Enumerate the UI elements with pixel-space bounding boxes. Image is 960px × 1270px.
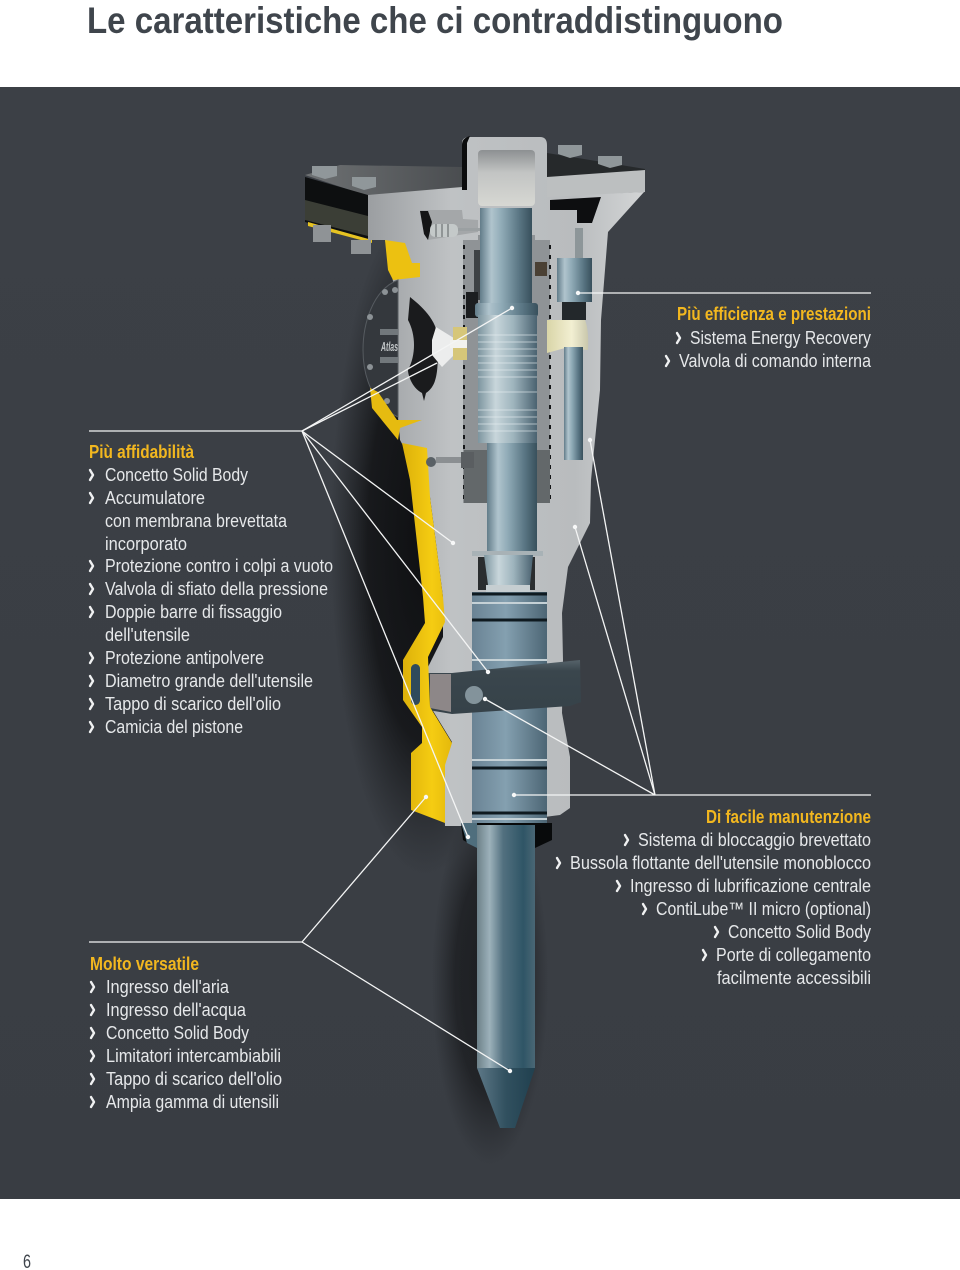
illustration: cutaway of hydraulic hammer [305,136,645,1165]
text block: Molto versatile: Limitatori intercambiabili [106,1046,281,1066]
yellow upper guard [385,240,420,280]
membrane and port [432,327,467,367]
text block: Più affidabilità: Concetto Solid Body [105,465,248,485]
right flange [547,145,645,198]
ribbed piston section [475,303,538,553]
text block: Più affidabilità: Camicia del pistone [105,717,243,737]
text block: Più affidabilità: Valvola di sfiato della pressione [105,579,328,599]
accumulator disc: Atlas [380,339,398,354]
central bore section [463,235,550,503]
accumulator chamber [408,297,438,401]
side slot [411,664,420,705]
text block: Di facile manutenzione: Ingresso di lubrificazione centrale [630,876,871,896]
text block: Più affidabilità: Protezione antipolvere [105,648,264,668]
text block: Di facile manutenzione: Sistema di bloccaggio brevettato [638,830,871,850]
text block: Molto versatile: Ingresso dell'acqua [106,1000,247,1020]
text block: Più affidabilità: Tappo di scarico dell'olio [105,694,281,714]
text block: Più affidabilità: con membrana brevettata [105,511,288,531]
text block: Di facile manutenzione: Porte di collegamento [716,945,871,965]
text block: Molto versatile: Ampia gamma di utensili [106,1092,279,1112]
upper piston [480,208,532,303]
text block: Di facile manutenzione: Bussola flottante dell'utensile monoblocco [570,853,871,873]
title: Le caratteristiche che ci contraddistinguono [87,0,783,41]
text block: Molto versatile: Molto versatile [90,954,199,974]
yellow side guard [402,443,452,823]
tool retaining pin [428,660,581,714]
text block: Più affidabilità [89,442,333,737]
tool shaft [477,825,535,1068]
text block: Molto versatile [90,954,282,1112]
air hose fitting [430,224,480,237]
right cream chamber [547,320,588,353]
lower piston [472,592,547,823]
text block: Più affidabilità: dell'utensile [105,625,190,645]
accumulator disc [363,280,398,417]
right rod [564,347,583,460]
text block: Più efficienza e prestazioni: Più efficienza e prestazioni [677,304,871,324]
side bolt [426,452,474,468]
main body casting [368,137,644,826]
text block: Più efficienza e prestazioni: Sistema Energy Recovery [690,328,871,348]
seal dots [464,245,550,500]
text block: Più efficienza e prestazioni [666,304,872,371]
text block: Più affidabilità: Diametro grande dell'utensile [105,671,313,691]
tool collar [461,823,552,848]
yellow middle guard [370,388,422,440]
text block: Più affidabilità: Più affidabilità [89,442,195,462]
hammer drop shadow [330,205,548,1165]
tool cone tip [477,1068,535,1128]
text block: Di facile manutenzione: Di facile manutenzione [706,807,871,827]
cap black edge [462,136,470,190]
text block: Più affidabilità: Doppie barre di fissaggio [105,602,282,622]
text block: Molto versatile: Ingresso dell'aria [106,977,230,997]
text block: Di facile manutenzione [557,807,871,988]
text block: Più affidabilità: Accumulatore [105,488,205,508]
text block: Di facile manutenzione: facilmente accessibili [717,968,871,988]
leader lines [89,291,871,1073]
bore dark seal blocks [464,250,550,503]
text block: Molto versatile: Concetto Solid Body [106,1023,249,1043]
text block: Di facile manutenzione: Concetto Solid Body [728,922,871,942]
top cap interior [478,150,535,206]
dark undercuts [420,197,601,240]
text block: Molto versatile: Tappo di scarico dell'olio [106,1069,282,1089]
text block: Più efficienza e prestazioni: Valvola di comando interna [679,351,872,371]
left flange [305,165,462,254]
right valve [557,228,592,320]
text block: Più affidabilità: incorporato [105,534,187,554]
piston neck [472,551,543,592]
text block: Di facile manutenzione: ContiLube™ II micro (optional) [656,899,871,919]
text block: Più affidabilità: Protezione contro i colpi a vuoto [105,556,333,576]
